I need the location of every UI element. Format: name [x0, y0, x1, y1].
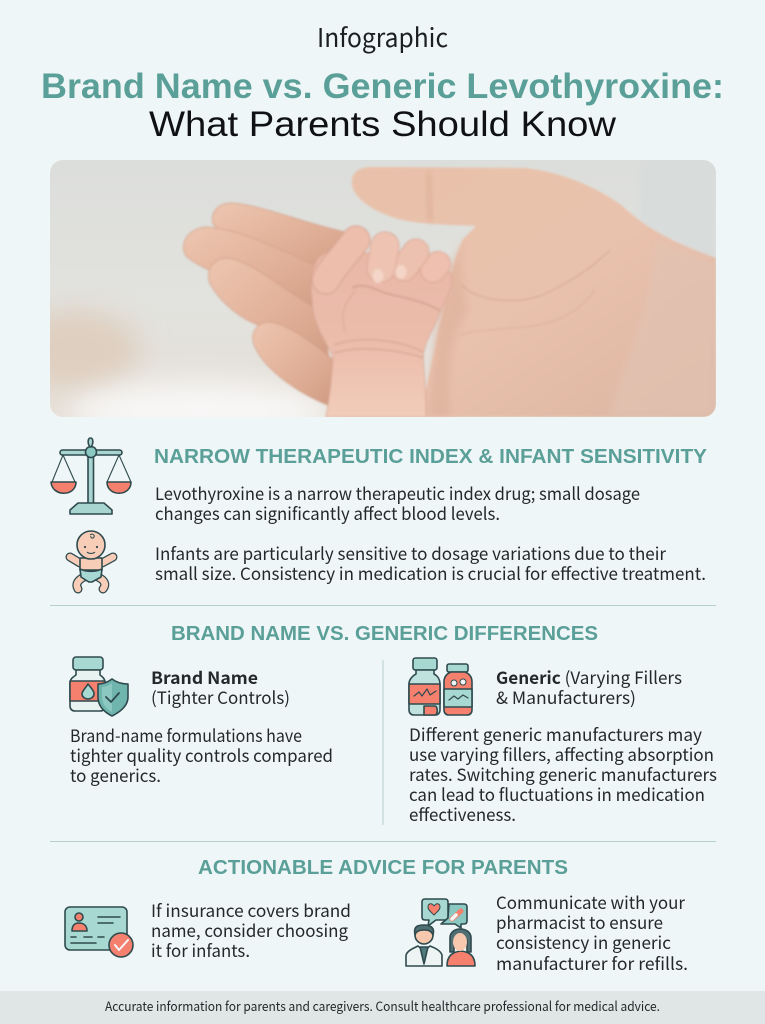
advice text: pharmacist: pharmacist to ensure: [496, 909, 663, 934]
baby palm creases: [352, 286, 440, 311]
section: narrow therapeutic index: [154, 446, 708, 585]
advice text: pharmacist: [496, 889, 688, 975]
generic text: can lead to fluctuations in medication: [409, 781, 705, 806]
advice text: pharmacist: Communicate with your: [496, 889, 685, 914]
brand name label: Brand Name: [151, 664, 258, 689]
text block: changes can significantly affect blood levels.: [155, 500, 500, 525]
icon: pharmacist and parent conversation: [406, 899, 475, 966]
heading: differences: BRAND NAME VS. GENERIC DIFFERENCES: [171, 623, 598, 645]
brand name text: to generics.: [70, 762, 161, 787]
generic text: effectiveness.: [409, 801, 516, 826]
text block: [155, 480, 706, 585]
text block: Infants are particularly sensitive to dosage variations due to their: [155, 540, 666, 565]
generic text: rates. Switching generic manufacturers: [409, 761, 717, 786]
advice text: insurance: it for infants.: [151, 937, 250, 962]
generic label: & Manufacturers): [496, 684, 636, 709]
main heading: [41, 67, 724, 144]
icon: balance scale: [51, 438, 131, 514]
icon: insurance card: [65, 907, 133, 957]
brand name label: [151, 664, 290, 709]
middle finger: [182, 226, 314, 306]
baby hand palm and wrist: [311, 248, 452, 417]
generic text: use varying fillers, affecting absorption: [409, 741, 714, 766]
generic text: [409, 721, 717, 826]
generic label: [496, 664, 682, 709]
icon: generic bottles: [409, 658, 472, 715]
footer band: Accurate information for parents and caregivers. Consult healthcare professional for medical advice.: [105, 996, 660, 1015]
brand name text: Brand-name formulations have: [70, 722, 302, 747]
advice text: insurance: [151, 897, 351, 962]
baby fingers: [433, 264, 438, 270]
advice text: insurance: name, consider choosing: [151, 917, 348, 942]
main heading: What Parents Should Know: [149, 105, 617, 144]
icon: brand bottle with shield: [70, 657, 128, 716]
advice text: pharmacist: consistency in generic: [496, 929, 671, 954]
icon: baby: [70, 531, 113, 589]
brand name text: [70, 722, 333, 787]
photo: adult hand holding baby hand: [50, 160, 716, 417]
little finger: [253, 322, 334, 406]
adult palm and thumb: [352, 167, 716, 417]
index finger: [212, 203, 345, 275]
main heading: Brand Name vs. Generic Levothyroxine:: [41, 67, 724, 106]
brand name text: tighter quality controls compared: [70, 742, 333, 767]
generic label: Generic (Varying Fillers: [496, 664, 682, 689]
ring finger: [208, 258, 330, 365]
generic text: Different generic manufacturers may: [409, 721, 702, 746]
heading: NARROW THERAPEUTIC INDEX & INFANT SENSITIVITY: [154, 446, 708, 468]
text block: Levothyroxine is a narrow therapeutic index drug; small dosage: [155, 480, 640, 505]
brand name label: (Tighter Controls): [151, 684, 290, 709]
heading: advice: ACTIONABLE ADVICE FOR PARENTS: [198, 857, 568, 879]
footer band: [0, 991, 765, 1024]
small title: Infographic: [317, 18, 448, 55]
advice text: pharmacist: manufacturer for refills.: [496, 950, 688, 975]
text block: small size. Consistency in medication is crucial for effective treatment.: [155, 560, 706, 585]
advice text: insurance: If insurance covers brand: [151, 897, 351, 922]
baby thumb: [326, 240, 356, 280]
